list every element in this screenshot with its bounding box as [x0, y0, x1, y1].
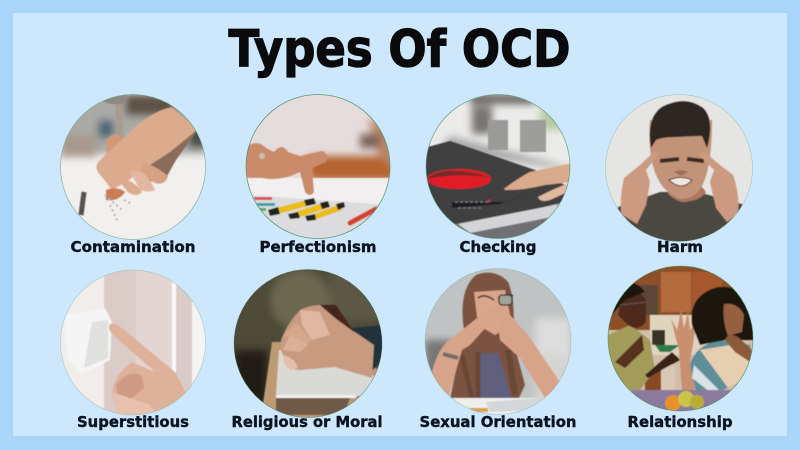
label: Perfectionism: Perfectionism [260, 238, 376, 256]
photo: contamination, hands under water [60, 94, 210, 240]
label: Sexual Orientation: Sexual Orientation [420, 413, 576, 431]
label: Superstitious: Superstitious [77, 413, 189, 431]
photo: harm, man gripping his temples [605, 94, 753, 245]
label: Harm: Harm [657, 238, 703, 256]
ring: relationship [608, 266, 753, 411]
ring: religious or moral [234, 270, 382, 418]
ring: contamination [60, 94, 206, 240]
ring: perfectionism [246, 94, 390, 238]
photo: religious or moral, hands folded on book [234, 269, 385, 420]
photo: checking, finger on stove panel [424, 94, 575, 240]
ring: checking [426, 94, 570, 238]
photo: relationship, arguing couple [608, 266, 756, 412]
label: Contamination: Contamination [70, 238, 196, 256]
photo: perfectionism, hand above pens [246, 94, 395, 240]
label: Relationship: Relationship [628, 413, 732, 431]
ring: superstitious [60, 270, 206, 415]
label: Religious or Moral: Religious or Moral [232, 413, 382, 431]
ring: harm [606, 94, 752, 242]
photo: superstitious, finger on light switch [60, 270, 208, 420]
photo: sexual orientation, woman pinching nose bridge [425, 268, 571, 415]
ring: sexual orientation [425, 268, 571, 414]
title: Types Of OCD [228, 20, 570, 80]
label: Checking: Checking [460, 238, 536, 256]
